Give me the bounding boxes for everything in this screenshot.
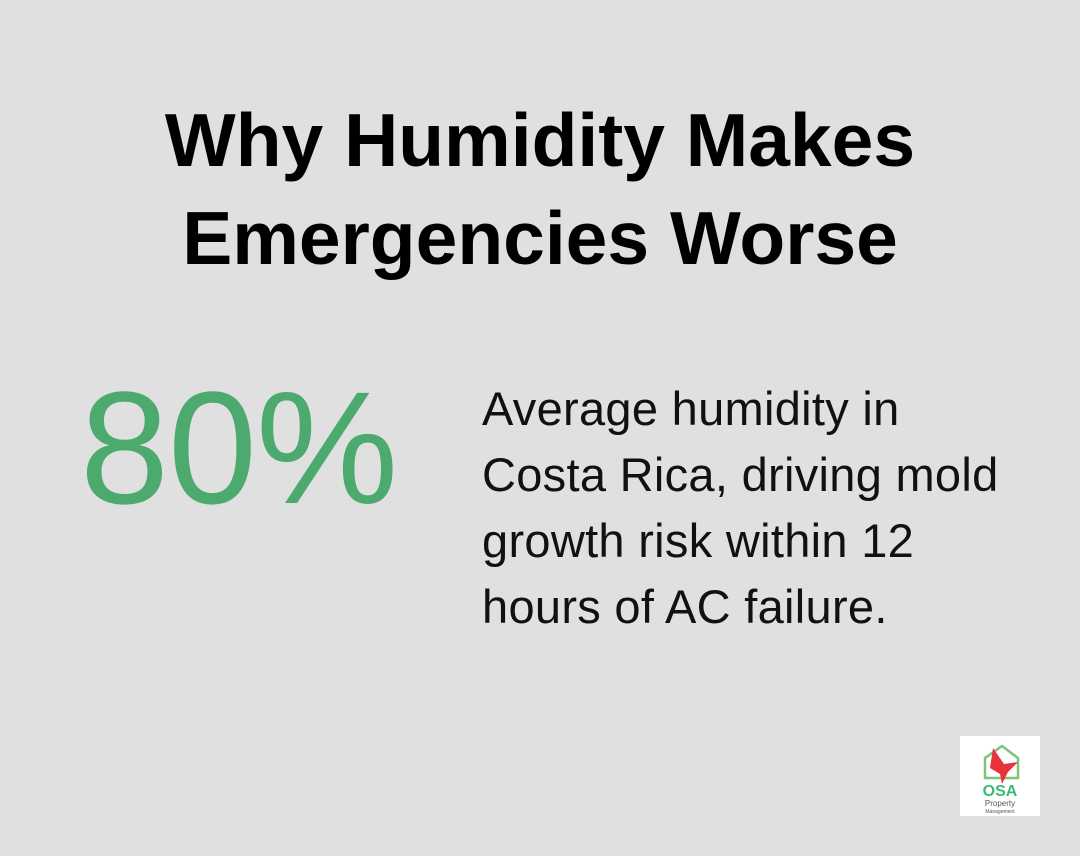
description text: growth risk within 12 xyxy=(482,514,914,567)
description text: hours of AC failure. xyxy=(482,580,888,633)
logo: OSA Property Management: Management xyxy=(985,809,1015,815)
description text: Average humidity in xyxy=(482,382,900,435)
logo: OSA Property Management: Property xyxy=(985,799,1015,808)
logo: OSA Property Management xyxy=(960,736,1040,816)
title xyxy=(165,98,915,280)
title: Why Humidity Makes xyxy=(165,98,915,182)
description text xyxy=(482,382,999,633)
stat: 80%: 80% xyxy=(80,358,397,537)
title: Emergencies Worse xyxy=(182,196,898,280)
description text: Costa Rica, driving mold xyxy=(482,448,999,501)
logo: OSA Property Management: OSA xyxy=(983,783,1018,800)
